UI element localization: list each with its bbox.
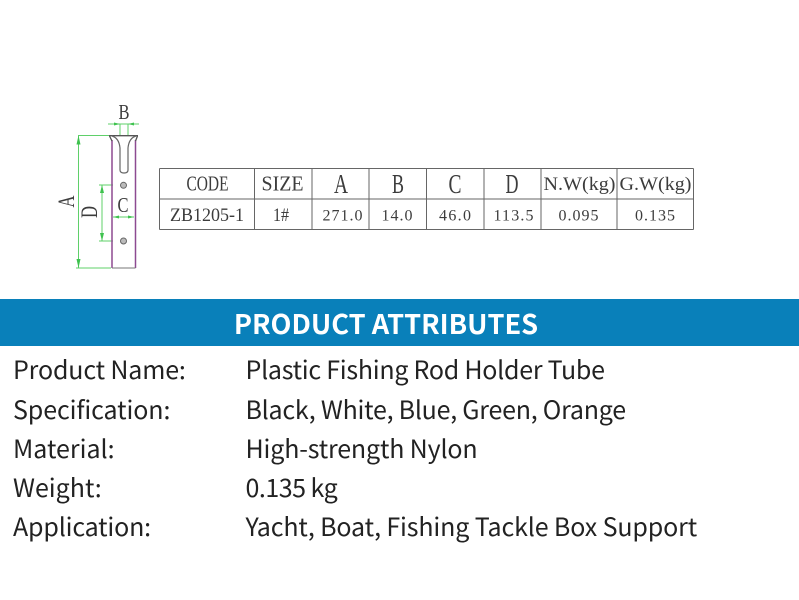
- table values: [170, 205, 675, 226]
- dimension lines: [76, 124, 139, 268]
- table values: 0.135: [635, 208, 675, 224]
- table header: D: [506, 169, 518, 199]
- technical drawing and dimensions table: [54, 100, 694, 268]
- mounting holes: [120, 182, 126, 244]
- table header: B: [392, 169, 404, 199]
- table header: C: [448, 169, 462, 199]
- table values: 113.5: [494, 208, 534, 224]
- table header: G.W(kg): [620, 174, 692, 195]
- table header: A: [334, 169, 348, 199]
- dimension arrows: [76, 122, 134, 268]
- attribute value: product name: Plastic Fishing Rod Holder Tube: [246, 351, 605, 387]
- dimension letters: B: [118, 100, 130, 124]
- banner: product attributes: PRODUCT ATTRIBUTES: [234, 302, 538, 342]
- table header: N.W(kg): [544, 174, 616, 195]
- tube outline: [109, 136, 138, 268]
- dimensions table: [160, 168, 694, 230]
- attribute value: application: Yacht, Boat, Fishing Tackle Box Support: [246, 508, 697, 544]
- table values: 1#: [273, 205, 289, 226]
- table values: 0.095: [558, 208, 598, 224]
- dimension letters: C: [118, 193, 128, 217]
- table grid: [160, 168, 694, 230]
- attribute label: specification: Specification:: [13, 391, 170, 427]
- tube dimension drawing: [54, 100, 139, 268]
- table header: [186, 169, 692, 199]
- dimension letters: [54, 100, 130, 218]
- attribute value: specification: Black, White, Blue, Green, Orange: [246, 391, 626, 427]
- table header: CODE: [186, 172, 228, 196]
- table values: 14.0: [382, 208, 412, 224]
- attribute value: material: High-strength Nylon: [246, 430, 478, 466]
- attribute label: product name: Product Name:: [13, 351, 186, 387]
- table values: 271.0: [322, 208, 362, 224]
- attribute label: application: Application:: [13, 508, 151, 544]
- banner: product attributes: [0, 299, 799, 346]
- table header: SIZE: [262, 172, 304, 196]
- dimension letters: D: [77, 206, 102, 218]
- dimension letters: A: [54, 195, 79, 208]
- table values: ZB1205-1: [170, 205, 244, 226]
- attribute label: weight: Weight:: [13, 469, 102, 505]
- attribute label: material: Material:: [13, 430, 115, 466]
- table values: 46.0: [439, 208, 471, 224]
- attribute value: weight: 0.135 kg: [246, 469, 337, 505]
